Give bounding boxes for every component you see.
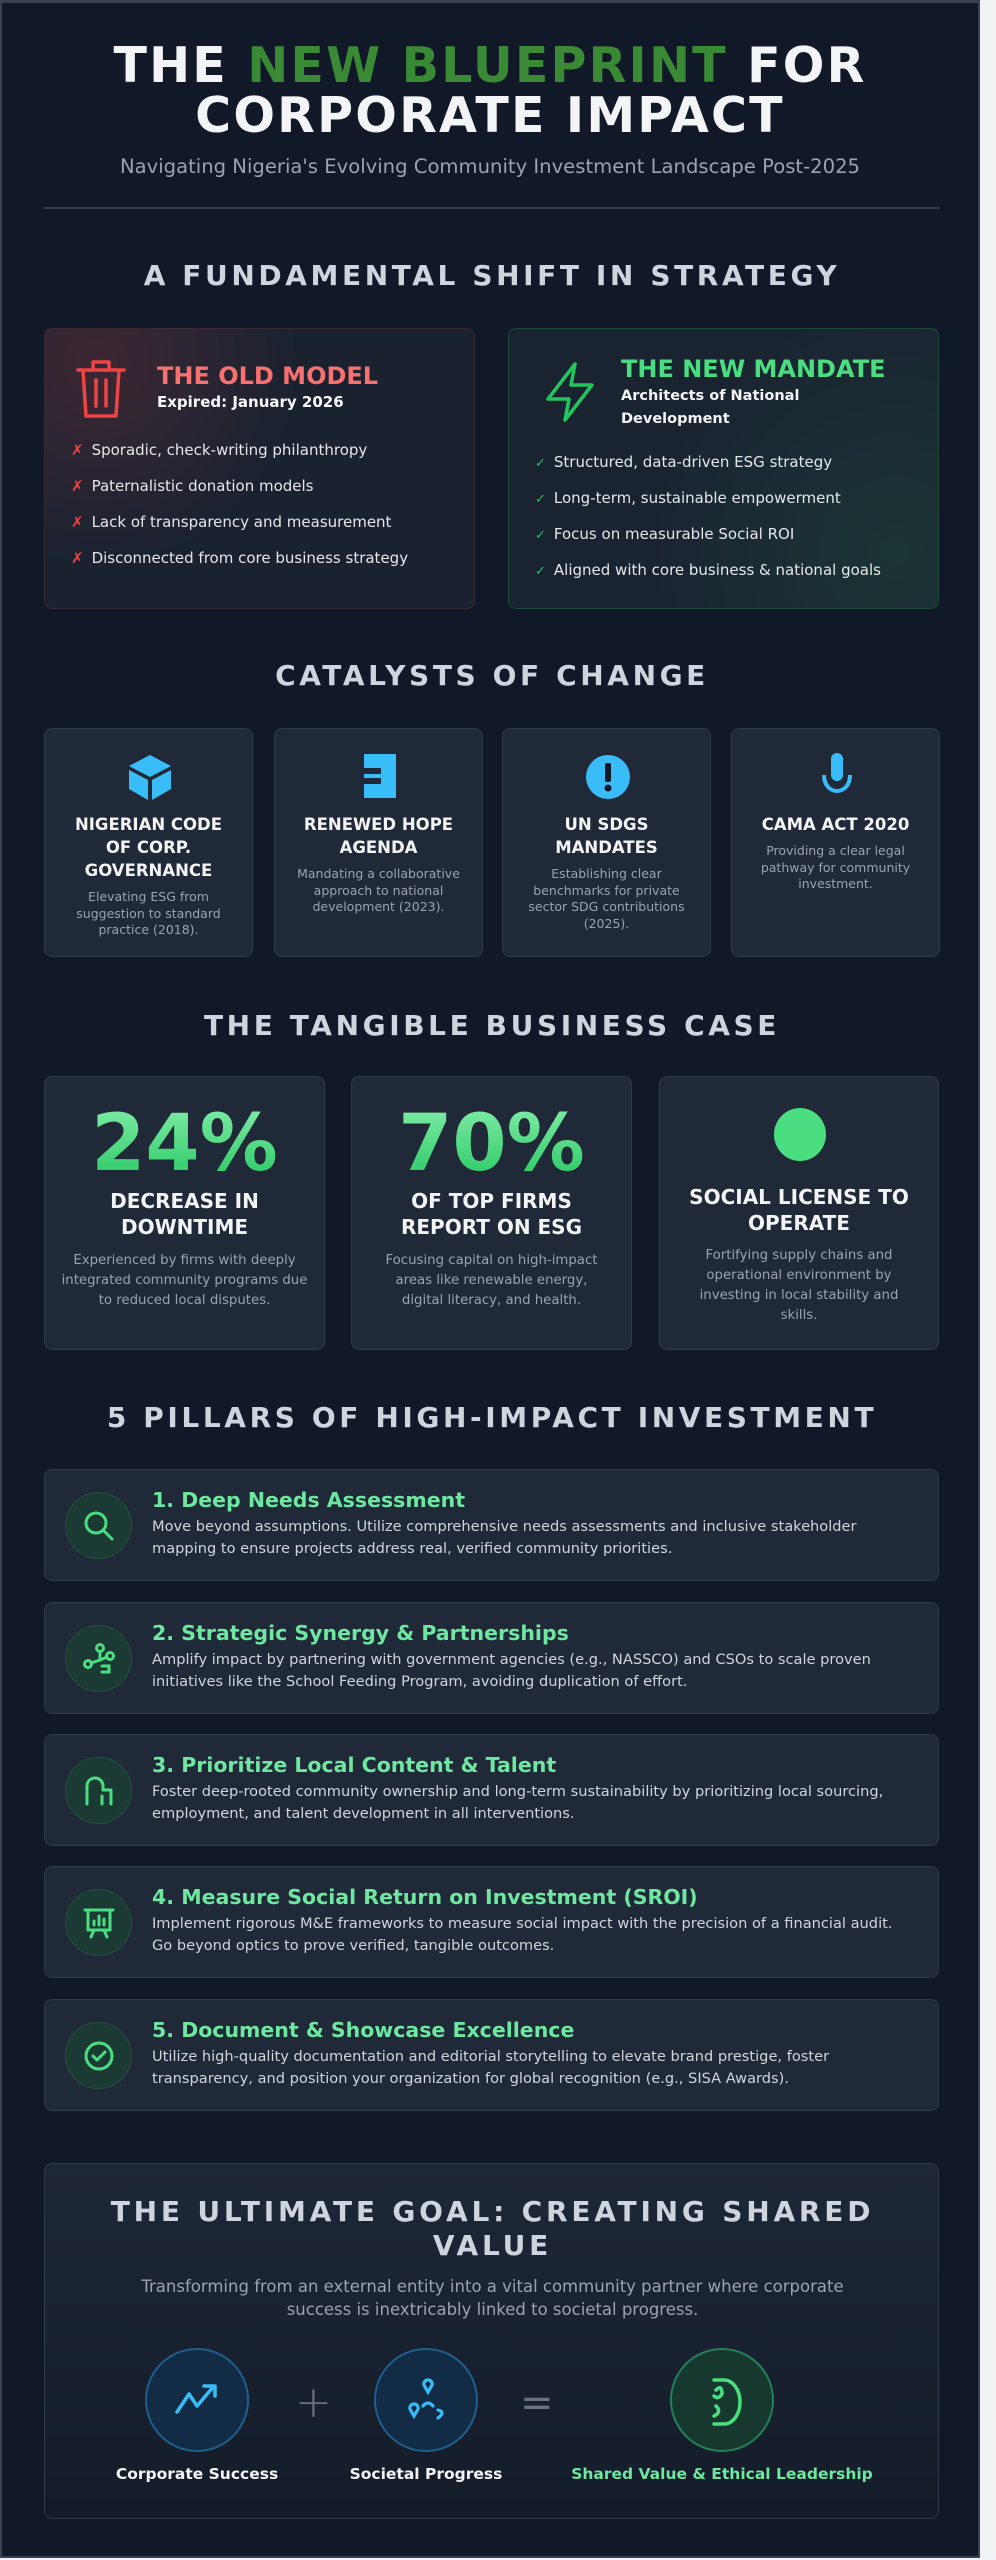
heading: fundamental shift: A FUNDAMENTAL SHIFT IN STRATEGY [144, 259, 840, 292]
panel: catalyst 4: Providing a clear legal pathway for community investment. [761, 843, 910, 891]
panel: catalyst 1: OF CORP. [106, 838, 191, 857]
pillar 3 [44, 1734, 939, 1846]
goal subtitle: Transforming from an external entity into a vital community partner where corporate success is inextricably linked to societal progress. [141, 2277, 844, 2319]
panel: catalyst 3: MANDATES [555, 838, 658, 857]
title: CORPORATE IMPACT [195, 87, 785, 144]
panel: catalyst 4 [731, 728, 940, 957]
icon: scroll [364, 754, 396, 798]
panel: social license: SOCIAL LICENSE TO [689, 1185, 909, 1209]
panel: stat 70% [351, 1076, 632, 1350]
panel: catalyst 1: Elevating ESG from suggestion to standard practice (2018). [76, 889, 221, 937]
panel: ultimate goal: Societal Progress [350, 2465, 502, 2483]
panel: stat 70%: REPORT ON ESG [401, 1215, 582, 1239]
icon: corporate success [145, 2348, 249, 2452]
panel: catalyst 2: RENEWED HOPE [304, 815, 453, 834]
panel: ultimate goal [44, 2163, 939, 2519]
pillar 5: Utilize high-quality documentation and editorial storytelling to elevate brand prestige, foster transparency, and position your organization for global recognition (e.g., SISA Awards). [152, 2048, 829, 2087]
icon: check circle [65, 2022, 132, 2089]
pillar 2: 2. Strategic Synergy & Partnerships [152, 1621, 569, 1645]
panel: stat 24% [44, 1076, 325, 1350]
panel: stat 70%: 70% [398, 1099, 585, 1189]
pillar 5: 5. Document & Showcase Excellence [152, 2018, 574, 2042]
panel: new mandate [508, 328, 939, 609]
panel: catalyst 1: GOVERNANCE [85, 861, 212, 880]
pillar 3: 3. Prioritize Local Content & Talent [152, 1753, 556, 1777]
pillar 4: Implement rigorous M&E frameworks to measure social impact with the precision of a financial audit. Go beyond optics to prove verified, tangible outcomes. [152, 1915, 892, 1954]
goal heading: THE ULTIMATE GOAL: CREATING SHARED VALUE [111, 2195, 874, 2262]
icon: exclamation [586, 755, 630, 799]
pillar 5 [44, 1999, 939, 2111]
panel: catalyst 3: Establishing clear benchmarks for private sector SDG contributions (2025). [528, 866, 685, 930]
icon: trash [76, 360, 126, 418]
panel: stat 70%: Focusing capital on high-impact areas like renewable energy, digital literacy, and health. [386, 1253, 597, 1308]
new mandate list: ✓ Aligned with core business & national goals [535, 561, 881, 579]
panel: stat 24%: Experienced by firms with deeply integrated community programs due to reduced local disputes. [62, 1253, 307, 1308]
icon: lightning [546, 362, 594, 422]
pillar 4: 4. Measure Social Return on Investment (SROI) [152, 1885, 698, 1909]
heading: business case: THE TANGIBLE BUSINESS CASE [204, 1009, 780, 1042]
panel: stat 70%: OF TOP FIRMS [411, 1189, 572, 1213]
old model list: ✗ Paternalistic donation models [71, 477, 314, 495]
new mandate list: ✓ Long-term, sustainable empowerment [535, 489, 841, 507]
old model list [71, 441, 408, 567]
old model list: ✗ Disconnected from core business strategy [71, 549, 408, 567]
panel: old model [44, 328, 475, 609]
new mandate title: THE NEW MANDATE [621, 355, 885, 383]
icon: societal progress [374, 2348, 478, 2452]
icon: cube [129, 755, 171, 800]
icon: green dot [774, 1108, 826, 1161]
panel: social license: OPERATE [748, 1211, 850, 1235]
panel: old model: Expired: January 2026 [157, 393, 344, 411]
labels: Corporate Success [116, 2465, 278, 2483]
pillar 4 [44, 1866, 939, 1978]
panel: catalyst 2: Mandating a collaborative approach to national development (2023). [297, 866, 460, 914]
plus: + [295, 2377, 332, 2428]
icon: search [65, 1492, 132, 1559]
heading: catalysts: CATALYSTS OF CHANGE [275, 659, 709, 692]
new mandate list: ✓ Focus on measurable Social ROI [535, 525, 794, 543]
equals: = [520, 2380, 554, 2426]
panel: stat 24%: DECREASE IN [110, 1189, 259, 1213]
title: THE NEW BLUEPRINT FOR [113, 37, 867, 94]
panel: stat 24%: 24% [91, 1099, 278, 1189]
panel: catalyst 3 [502, 728, 711, 957]
subtitle: Navigating Nigeria's Evolving Community Investment Landscape Post-2025 [120, 155, 860, 178]
pillar 1: Move beyond assumptions. Utilize comprehensive needs assessments and inclusive stakeholder mapping to ensure projects address real, verified community priorities. [152, 1518, 857, 1557]
pillar 2 [44, 1602, 939, 1714]
panel: ultimate goal: Shared Value & Ethical Leadership [571, 2465, 873, 2483]
old model list: ✗ Lack of transparency and measurement [71, 513, 391, 531]
icon: microphone [822, 753, 852, 793]
panel: catalyst 1 [44, 728, 253, 957]
panel: stat 24%: DOWNTIME [121, 1215, 248, 1239]
old model list: ✗ Sporadic, check-writing philanthropy [71, 441, 367, 459]
panel: catalyst 2: AGENDA [340, 838, 417, 857]
panel: catalyst 3: UN SDGS [565, 815, 648, 834]
icon: presentation chart [65, 1889, 132, 1956]
pillar 2: Amplify impact by partnering with government agencies (e.g., NASSCO) and CSOs to scale proven initiatives like the School Feeding Program, avoiding duplication of effort. [152, 1651, 871, 1690]
panel: catalyst 1: NIGERIAN CODE [75, 815, 222, 834]
panel: new mandate: Architects of National Development [621, 388, 799, 427]
new mandate list: ✓ Structured, data-driven ESG strategy [535, 453, 832, 471]
pillar 1 [44, 1469, 939, 1581]
icon: local [65, 1757, 132, 1824]
panel: catalyst 4: CAMA ACT 2020 [762, 815, 909, 834]
title [113, 37, 867, 144]
new mandate list [535, 453, 881, 579]
icon: network [65, 1625, 132, 1692]
panel: social license [659, 1076, 939, 1350]
icon: shared value [670, 2348, 774, 2452]
pillar 1: 1. Deep Needs Assessment [152, 1488, 465, 1512]
heading: pillars: 5 PILLARS OF HIGH-IMPACT INVESTMENT [107, 1401, 877, 1434]
panel: social license: Fortifying supply chains and operational environment by investing in local stability and skills. [700, 1248, 898, 1323]
pillar 3: Foster deep-rooted community ownership and long-term sustainability by prioritizing local sourcing, employment, and talent development in all interventions. [152, 1783, 883, 1822]
panel: catalyst 2 [274, 728, 483, 957]
old model title: THE OLD MODEL [157, 362, 378, 390]
